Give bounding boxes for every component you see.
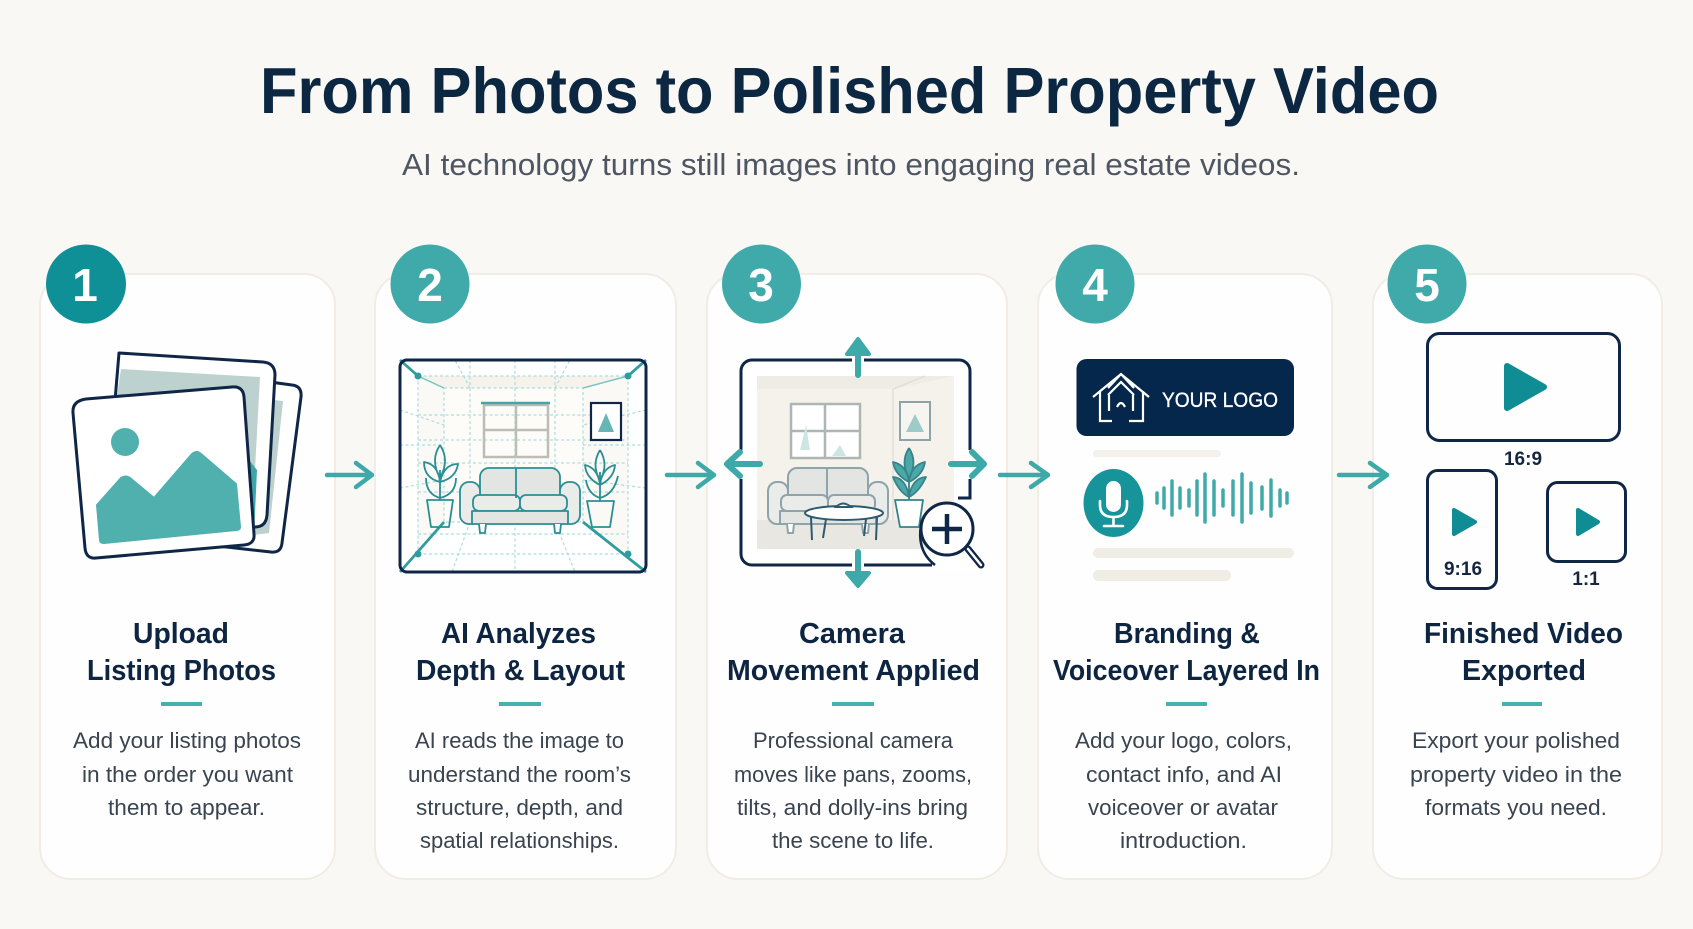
icon: 1:1 video: [1548, 482, 1626, 590]
description: camera: the scene to life.: [772, 828, 934, 853]
heading: upload: [87, 618, 276, 687]
subtitle: AI technology turns still images into engaging real estate videos.: [402, 147, 1300, 182]
arrow: pan down: [847, 552, 869, 586]
arrow: step 3 to 4: [1000, 463, 1048, 487]
description: analyze: spatial relationships.: [420, 828, 619, 853]
icon: 16:9 video: 16:9: [1504, 449, 1542, 470]
description: export: property video in the: [1410, 762, 1622, 787]
description: analyze: [408, 728, 631, 853]
description: camera: moves like pans, zooms,: [734, 762, 972, 787]
icon: 9:16 video: [1428, 470, 1496, 588]
heading: camera: Camera: [799, 618, 906, 650]
logo badge: YOUR LOGO: [1162, 389, 1278, 412]
panel: step 3 camera: [707, 244, 1007, 879]
step number 3: 3: [748, 259, 774, 311]
arrow: step 4 to 5: [1339, 463, 1387, 487]
step number 2: 2: [417, 259, 443, 311]
step number 1: 1: [72, 259, 98, 311]
description: camera: [734, 728, 972, 853]
icon: 1:1 video: 1:1: [1572, 569, 1600, 590]
heading: export: Exported: [1462, 655, 1586, 687]
description: branding: voiceover or avatar: [1088, 795, 1278, 820]
description: camera: Professional camera: [753, 728, 954, 753]
heading: camera: [727, 618, 980, 687]
heading: export: Finished Video: [1424, 618, 1623, 650]
description: export: [1410, 728, 1622, 820]
heading: analyze: Depth & Layout: [416, 655, 625, 687]
arrow: pan up: [847, 339, 869, 375]
panel: step 2 analyze: [375, 244, 676, 879]
step number 3: [722, 244, 801, 324]
description: export: Export your polished: [1412, 728, 1620, 753]
description: camera: tilts, and dolly-ins bring: [737, 795, 968, 820]
description: branding: introduction.: [1120, 828, 1247, 853]
icon: stacked photos: [73, 353, 301, 558]
description: branding: Add your logo, colors,: [1075, 728, 1292, 753]
description: analyze: AI reads the image to: [415, 728, 624, 753]
step number 4: [1056, 244, 1134, 324]
description: analyze: understand the room’s: [408, 762, 631, 787]
step number 5: 5: [1414, 259, 1440, 311]
description: analyze: structure, depth, and: [416, 795, 623, 820]
icon: house logo: [1093, 374, 1149, 421]
arrow: step 2 to 3: [667, 463, 714, 487]
icon: 16:9 video: [1428, 334, 1620, 470]
description: upload: them to appear.: [108, 795, 265, 820]
description: upload: Add your listing photos: [73, 728, 301, 753]
heading: camera: Movement Applied: [727, 655, 980, 687]
description: upload: in the order you want: [82, 762, 293, 787]
logo badge: [1076, 359, 1294, 436]
heading: branding: Branding &: [1114, 618, 1260, 650]
heading: analyze: AI Analyzes: [441, 618, 596, 650]
description: upload: [73, 728, 301, 820]
step number 2: [390, 244, 470, 324]
icon: microphone: [1084, 469, 1144, 537]
heading: export: [1424, 618, 1623, 687]
description: export: formats you need.: [1425, 795, 1607, 820]
step number 5: [1388, 244, 1466, 324]
audio waveform: [1157, 474, 1287, 522]
icon: 9:16 video: 9:16: [1444, 559, 1482, 580]
heading: upload: Listing Photos: [87, 655, 276, 687]
icon: camera movement frame: [734, 352, 976, 572]
panel: step 4 branding: [1038, 244, 1332, 879]
description: branding: [1075, 728, 1292, 853]
step number 1: [46, 244, 126, 324]
panel: step 1 upload: [40, 244, 335, 879]
arrow: pan right: [951, 452, 984, 476]
description: branding: contact info, and AI: [1086, 762, 1282, 787]
step number 4: 4: [1082, 259, 1108, 311]
arrow: pan left: [727, 452, 760, 476]
title: From Photos to Polished Property Video: [260, 54, 1439, 127]
panel: step 5 export: [1373, 244, 1662, 879]
heading: branding: [1053, 618, 1320, 687]
icon: zoom magnifier: [920, 503, 981, 565]
icon: room depth grid: [400, 360, 646, 572]
heading: analyze: [416, 618, 625, 687]
arrow: step 1 to 2: [327, 463, 372, 487]
heading: branding: Voiceover Layered In: [1053, 655, 1320, 687]
heading: upload: Upload: [133, 618, 229, 650]
